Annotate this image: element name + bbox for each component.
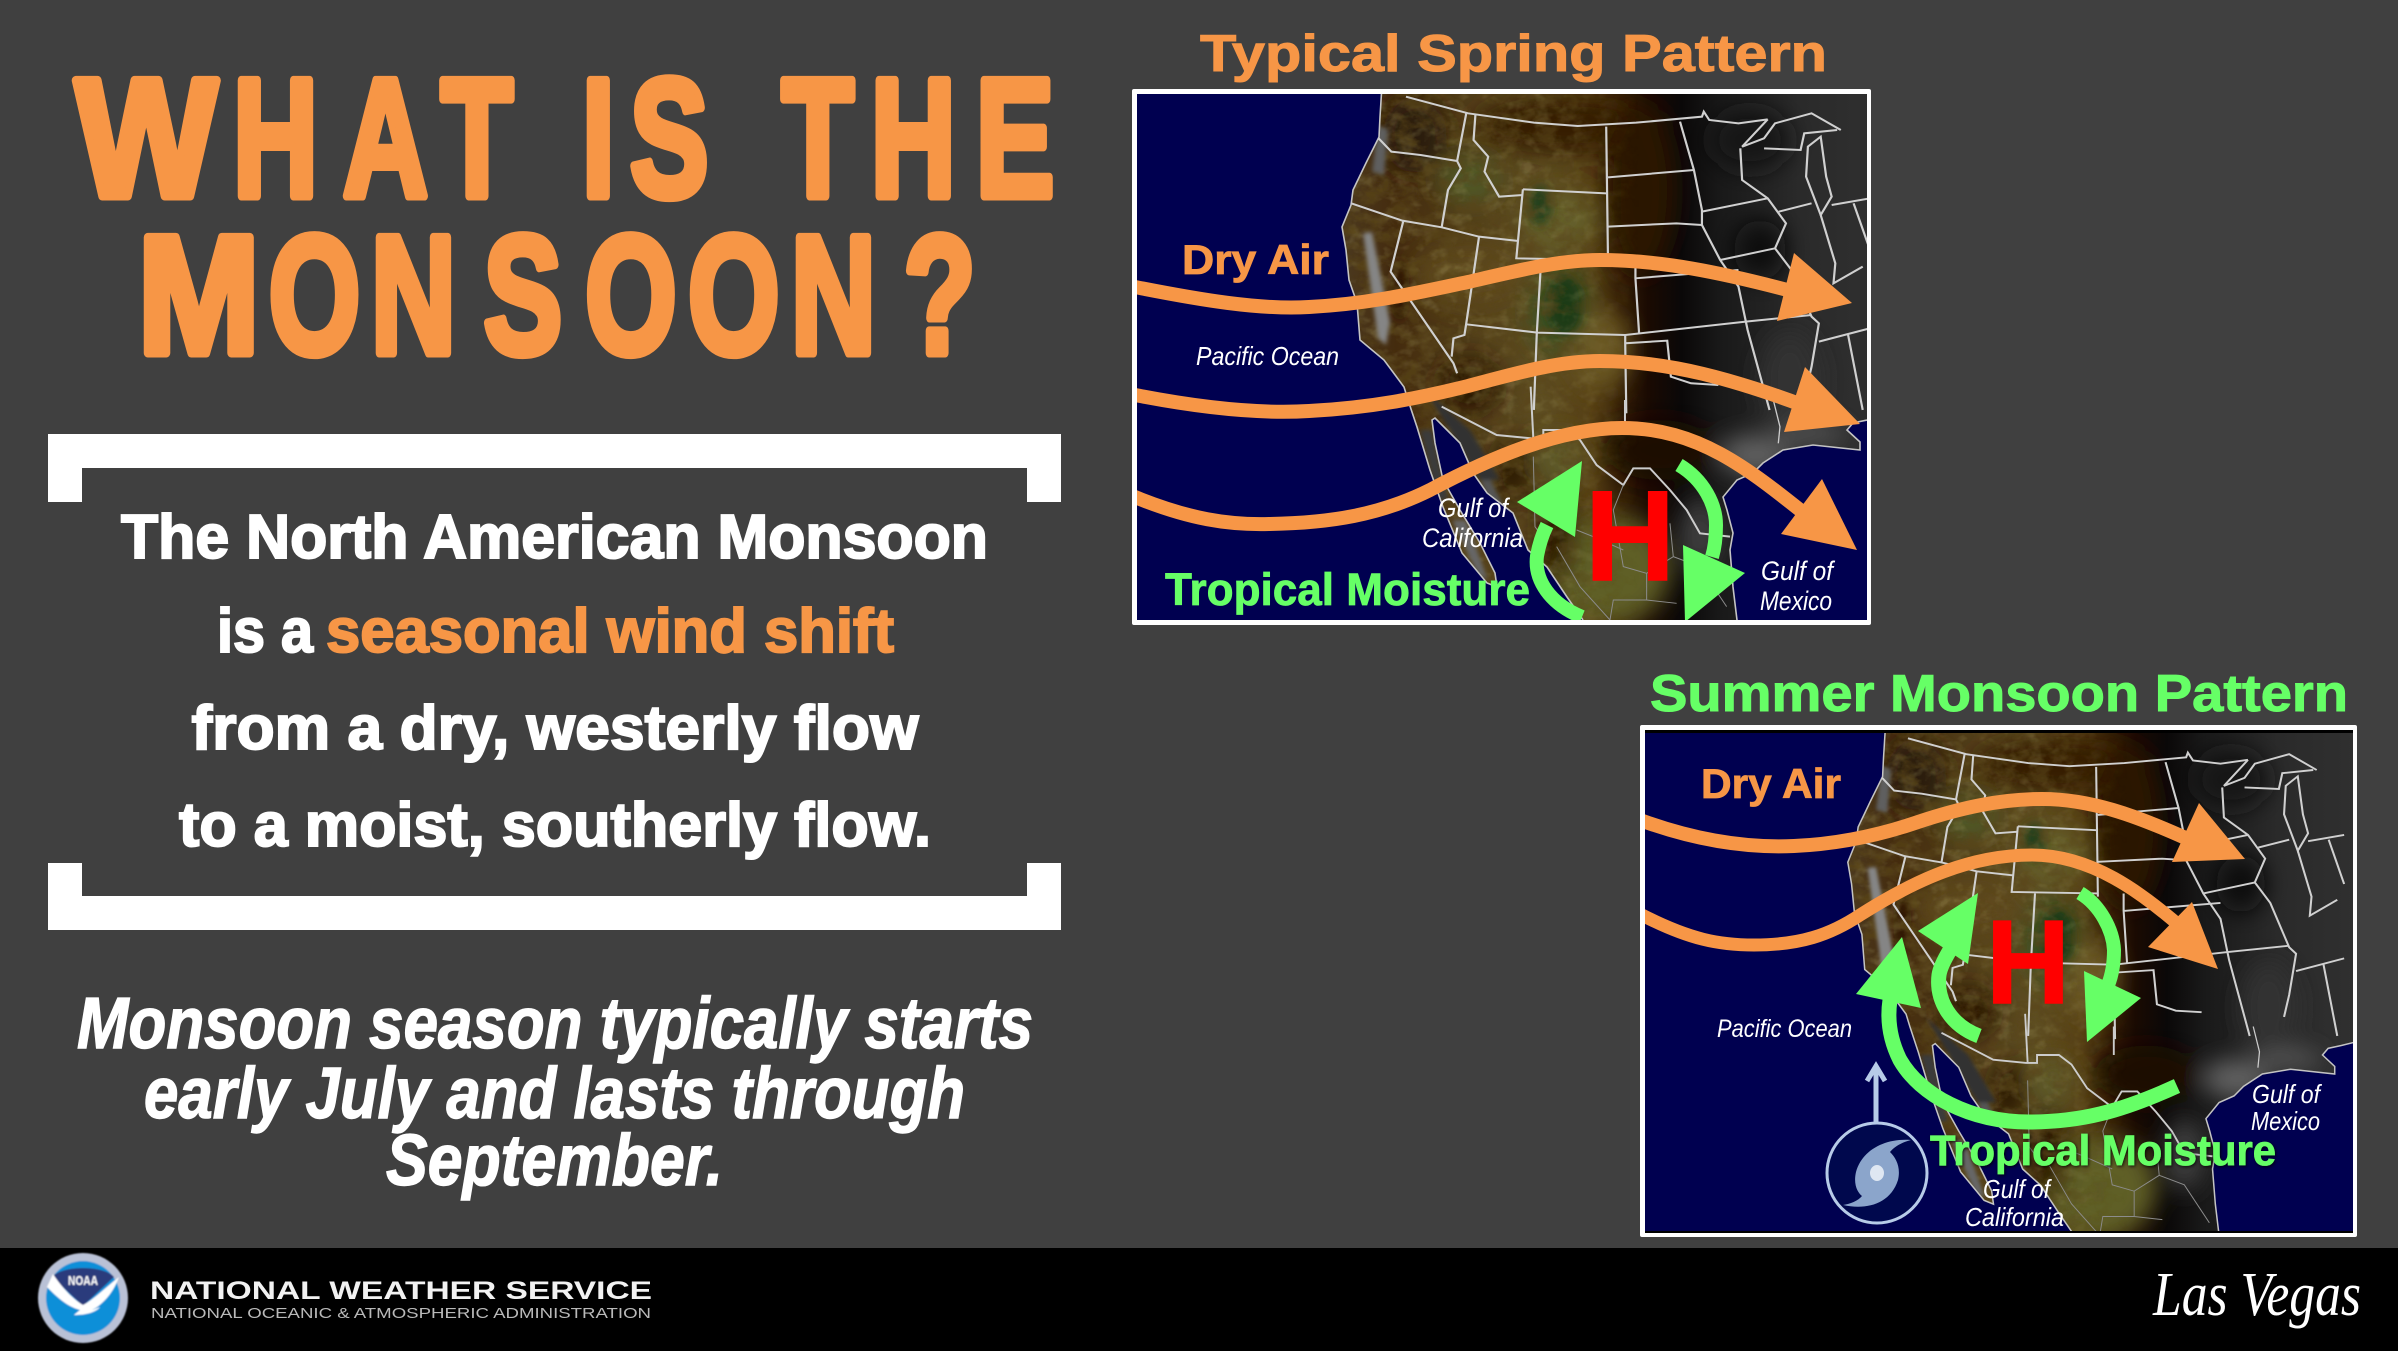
label: gulf of california: California — [1965, 1202, 2064, 1232]
definition text: to a moist, southerly flow. — [179, 791, 931, 860]
label: gulf of mexico — [2252, 1084, 2322, 1130]
definition text: The North American Monsoon — [121, 503, 988, 572]
label: gulf of mexico: Gulf of — [2252, 1079, 2322, 1109]
top bracket — [48, 434, 1061, 502]
bottom bracket — [48, 863, 1061, 930]
dry air flow arrows — [1640, 799, 2245, 969]
high pressure marker: H — [1585, 465, 1675, 608]
label: pacific ocean: Pacific Ocean — [1717, 1015, 1852, 1043]
footer bar — [0, 1248, 2398, 1351]
definition text — [121, 503, 988, 860]
title — [76, 44, 1054, 389]
season note: Monsoon season typically starts — [77, 984, 1033, 1064]
agency name: NATIONAL WEATHER SERVICE — [150, 1277, 652, 1305]
label: gulf of mexico: Gulf of — [1761, 556, 1835, 586]
label: pacific ocean: Pacific Ocean — [1196, 341, 1339, 371]
heading: typical spring pattern: Typical Spring Pattern — [1200, 25, 1827, 83]
icon: noaa logo — [38, 1253, 128, 1343]
heading: summer monsoon pattern: Summer Monsoon Pattern — [1650, 665, 2348, 723]
label: gulf of california: Gulf of — [1438, 493, 1510, 523]
title: W — [76, 44, 217, 232]
label: gulf of mexico — [1760, 560, 1836, 610]
label: tropical moisture: Tropical Moisture — [1930, 1127, 2276, 1175]
label: dry air: Dry Air — [1182, 236, 1329, 283]
label: tropical moisture: Tropical Moisture — [1165, 564, 1530, 615]
season note: September. — [386, 1121, 723, 1201]
season note: early July and lasts through — [144, 1054, 965, 1134]
title: HAT IS THE — [233, 44, 1054, 232]
office name: Las Vegas — [2152, 1261, 2361, 1329]
parent agency name: NATIONAL OCEANIC & ATMOSPHERIC ADMINISTRATION — [151, 1305, 651, 1322]
dry air flow arrows — [1130, 253, 1860, 550]
title: M — [138, 201, 260, 389]
season note — [77, 984, 1033, 1201]
icon: hurricane with track arrow — [1827, 1066, 1927, 1223]
label: gulf of california: California — [1422, 523, 1523, 553]
label: gulf of california — [1966, 1179, 2064, 1226]
label: gulf of mexico: Mexico — [1760, 586, 1832, 616]
definition text: seasonal wind shift — [326, 597, 894, 666]
definition panel — [48, 434, 1061, 930]
terrain map — [1847, 733, 2353, 1231]
definition text: from a dry, westerly flow — [192, 694, 919, 763]
panel: summer map — [1640, 725, 2357, 1237]
moisture circulation arrows — [1856, 893, 2177, 1122]
label: gulf of california: Gulf of — [1983, 1174, 2052, 1204]
panel: spring map — [1132, 89, 1871, 625]
moisture circulation arrows — [1517, 461, 1745, 622]
label: dry air: Dry Air — [1701, 760, 1841, 807]
icon: noaa logo: NOAA — [68, 1273, 98, 1288]
terrain map — [1137, 94, 1867, 620]
high pressure marker: H — [1986, 896, 2070, 1029]
label: gulf of california — [1423, 498, 1522, 548]
title: ONSOON? — [269, 201, 976, 389]
label: gulf of mexico: Mexico — [2251, 1106, 2320, 1136]
definition text: is a — [217, 597, 313, 666]
